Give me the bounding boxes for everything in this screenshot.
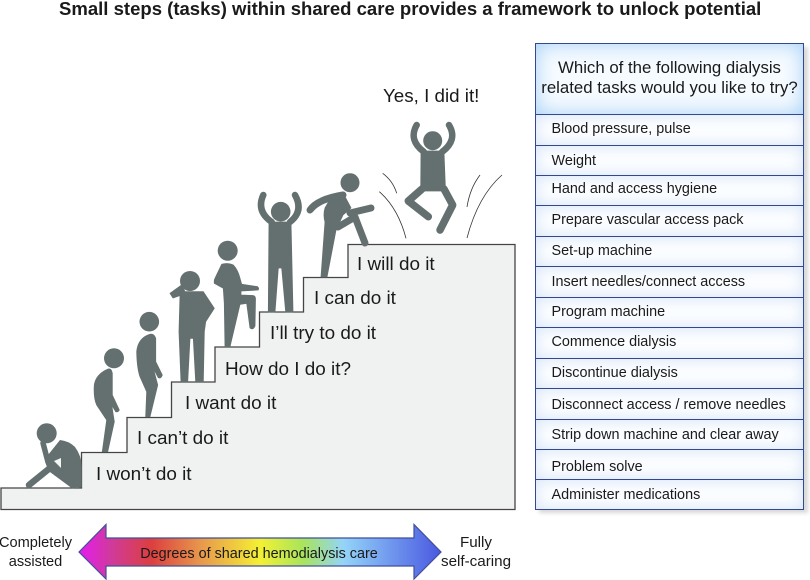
step labels: I can do it [314, 288, 397, 309]
task: program machine [535, 297, 804, 328]
task: blood pressure [535, 114, 804, 146]
task: problem solve [535, 449, 804, 480]
double arrow: degrees of shared care [79, 524, 441, 579]
task: vascular access pack: Prepare vascular access pack [552, 212, 743, 228]
figure: head raised, standing [137, 312, 162, 417]
task: hygiene: Hand and access hygiene [552, 180, 717, 196]
step labels: How do I do it? [225, 359, 351, 380]
task: problem solve: Problem solve [552, 459, 643, 475]
panel heading: Which of the following dialysis [558, 58, 781, 77]
task: strip down machine [535, 419, 804, 450]
task: commence dialysis: Commence dialysis [552, 334, 676, 350]
label: completely assisted: Completely [0, 535, 73, 551]
figure: jumping [408, 125, 453, 230]
exclamation: Yes, I did it!: Yes, I did it! [383, 85, 479, 106]
step labels: I can’t do it [137, 428, 229, 449]
panel heading: related tasks would you like to try? [541, 78, 798, 96]
task: set-up machine: Set-up machine [552, 243, 652, 259]
step labels: I will do it [357, 254, 435, 275]
task: strip down machine: Strip down machine and clear away [552, 427, 779, 443]
figure: arms raised [261, 195, 299, 312]
task: insert needles [535, 266, 804, 298]
label: fully self-caring: Fully [460, 534, 492, 551]
task: discontinue dialysis: Discontinue dialysis [552, 365, 678, 381]
task: insert needles: Insert needles/connect access [552, 274, 745, 290]
panel: dialysis related tasks [535, 43, 804, 509]
panel heading [535, 43, 804, 115]
task: set-up machine [535, 236, 804, 267]
task: weight: Weight [552, 152, 596, 168]
task: weight [535, 145, 804, 176]
jump motion lines [379, 173, 502, 238]
figure: thinking, hand on head [170, 271, 214, 382]
step labels: I’ll try to do it [270, 323, 377, 344]
label: fully self-caring: self-caring [441, 553, 511, 570]
task: commence dialysis [535, 327, 804, 359]
label: completely assisted [0, 535, 73, 570]
figure: slumped, standing [94, 348, 124, 452]
label: fully self-caring [441, 534, 511, 570]
label: completely assisted: assisted [9, 554, 62, 570]
task: vascular access pack [535, 205, 804, 237]
double arrow: degrees of shared care: Degrees of shared hemodialysis care [140, 546, 378, 562]
task: disconnect access: Disconnect access / remove needles [552, 397, 786, 413]
task: administer medications [535, 479, 804, 510]
task: blood pressure: Blood pressure, pulse [552, 121, 691, 137]
staircase [1, 244, 515, 510]
figure: climbing a step [310, 173, 371, 277]
step labels: I won’t do it [96, 464, 192, 485]
figure: lifting a foot [214, 241, 259, 347]
task: administer medications: Administer medications [552, 487, 700, 503]
task: hygiene [535, 175, 804, 206]
step labels [96, 254, 435, 485]
task: program machine: Program machine [552, 304, 665, 320]
task: discontinue dialysis [535, 358, 804, 389]
figure: seated, head in hands [29, 423, 82, 488]
task: disconnect access [535, 388, 804, 420]
step labels: I want do it [185, 393, 277, 414]
